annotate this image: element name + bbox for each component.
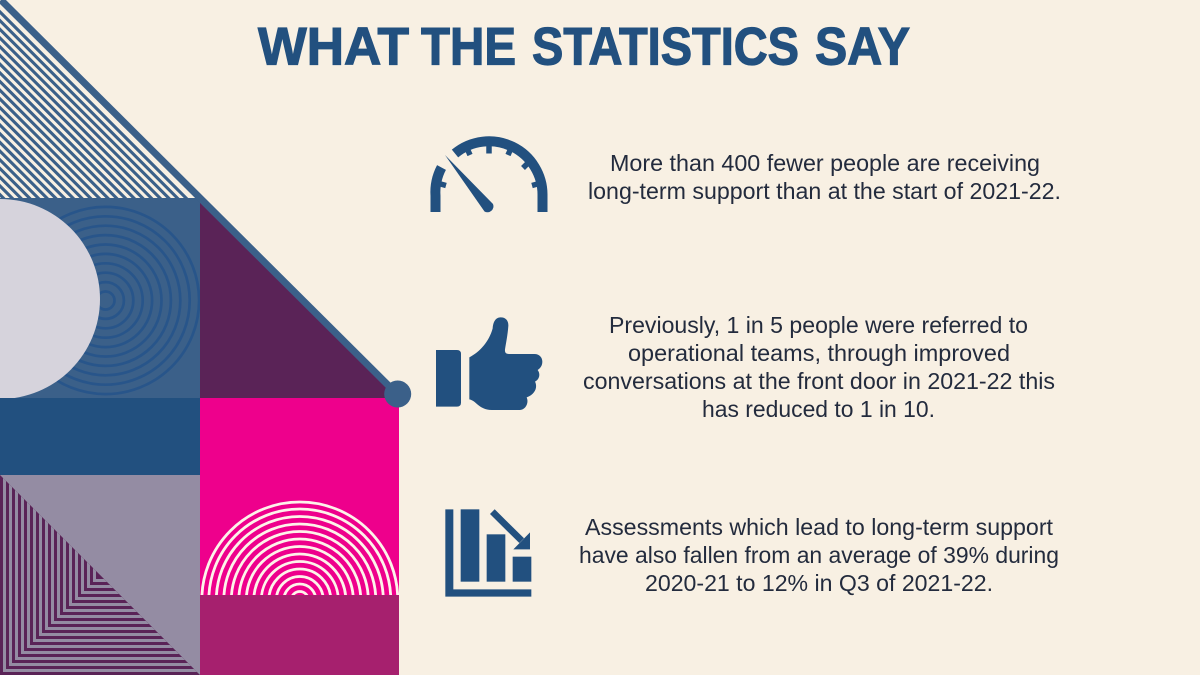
text: front door referrals: conversations at the front door in 2021-22 this — [583, 368, 1055, 394]
roof line — [1, 0, 397, 394]
text: assessments: have also fallen from an average of 39% during — [579, 542, 1059, 568]
concentric rings — [56, 206, 200, 396]
striped roof triangle — [0, 10, 188, 198]
icon: thumbs up — [436, 317, 542, 410]
title: THE — [421, 18, 516, 76]
icon: falling bar chart — [445, 509, 531, 597]
text: front door referrals: has reduced to 1 in 10. — [702, 396, 935, 422]
white arch rings — [200, 500, 399, 595]
purple triangle — [200, 200, 398, 398]
magenta panel — [200, 398, 399, 596]
grey panel — [0, 475, 200, 675]
nested purple triangles — [0, 475, 200, 675]
text: long-term support: More than 400 fewer people are receiving — [610, 150, 1040, 176]
text: front door referrals: operational teams, through improved — [628, 340, 1010, 366]
panel: geometric house illustration — [0, 0, 411, 675]
text: long-term support: long-term support than at the start of 2021-22. — [588, 178, 1061, 204]
blue square panel — [0, 198, 200, 398]
title: SAY — [815, 18, 910, 76]
text: assessments: 2020-21 to 12% in Q3 of 2021-22. — [645, 570, 993, 596]
navy band — [0, 398, 200, 475]
pale half circle — [0, 199, 100, 399]
roof end dot — [384, 380, 411, 408]
title: WHAT — [258, 18, 409, 76]
icon: speedometer — [435, 141, 543, 212]
text: front door referrals: Previously, 1 in 5 people were referred to — [609, 312, 1028, 338]
title: STATISTICS — [532, 18, 799, 76]
text: assessments: Assessments which lead to long-term support — [585, 514, 1054, 540]
dark magenta base — [200, 595, 399, 675]
